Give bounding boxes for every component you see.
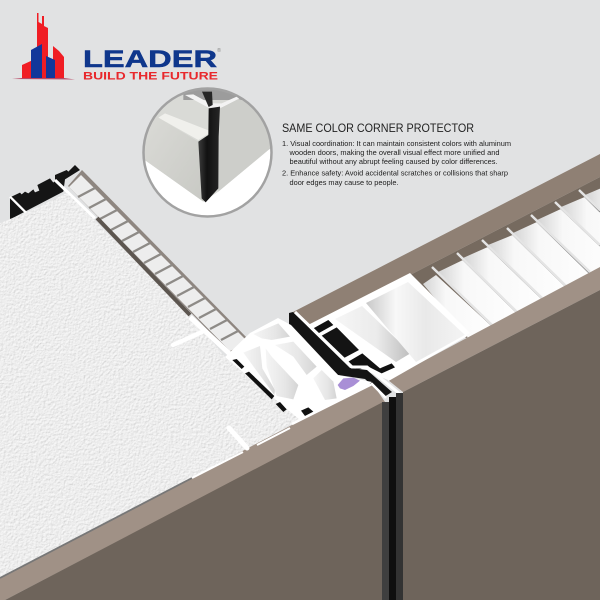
inset circle: corner protector detail: [140, 85, 280, 216]
left door: textured panel: [0, 193, 300, 578]
text block: point 2: door edges may cause to people.: [290, 178, 398, 187]
protector strip: [202, 92, 213, 107]
right door: top strip: [293, 154, 600, 327]
left door: edge details: [0, 218, 290, 578]
text block: point 2: 2. Enhance safety: Avoid accidental scratches or collisions that sharp: [282, 168, 508, 178]
centre black band: [289, 312, 400, 397]
right door: white trim: [388, 335, 467, 380]
left door: core profile: [225, 318, 372, 432]
right door: face: [403, 290, 600, 600]
black reinforcing chambers: [313, 320, 395, 373]
text block: point 2: [282, 168, 508, 187]
left door: taupe edge: [0, 383, 385, 600]
left door: black profile: [10, 165, 95, 219]
right door: taupe edge: [388, 267, 600, 392]
right door: honeycomb ribs: [410, 177, 600, 340]
icon: building skyline: [12, 13, 75, 80]
purple gasket: [338, 378, 360, 390]
text block: point 1: beautiful without any abrupt feeling caused by color differences.: [290, 157, 498, 166]
brand name: LEADER: [83, 46, 217, 73]
right door: hollow chambers: [306, 273, 470, 380]
description: [282, 121, 511, 187]
logo: [12, 13, 221, 82]
heading: SAME COLOR CORNER PROTECTOR: [282, 121, 474, 135]
text block: point 1: 1. Visual coordination: It can maintain consistent colors with aluminum: [282, 139, 511, 148]
text block: point 1: [282, 139, 511, 166]
corner protector groove: [382, 393, 403, 600]
text block: point 1: wooden doors, making the overall visual effect more unified and: [288, 148, 500, 157]
black slots: [232, 359, 313, 416]
left door: ladder frame: [68, 170, 252, 353]
left door: face: [5, 402, 383, 600]
trademark: ®: [217, 47, 221, 54]
slogan: BUILD THE FUTURE: [83, 70, 218, 82]
white trim at corner: [292, 384, 386, 424]
